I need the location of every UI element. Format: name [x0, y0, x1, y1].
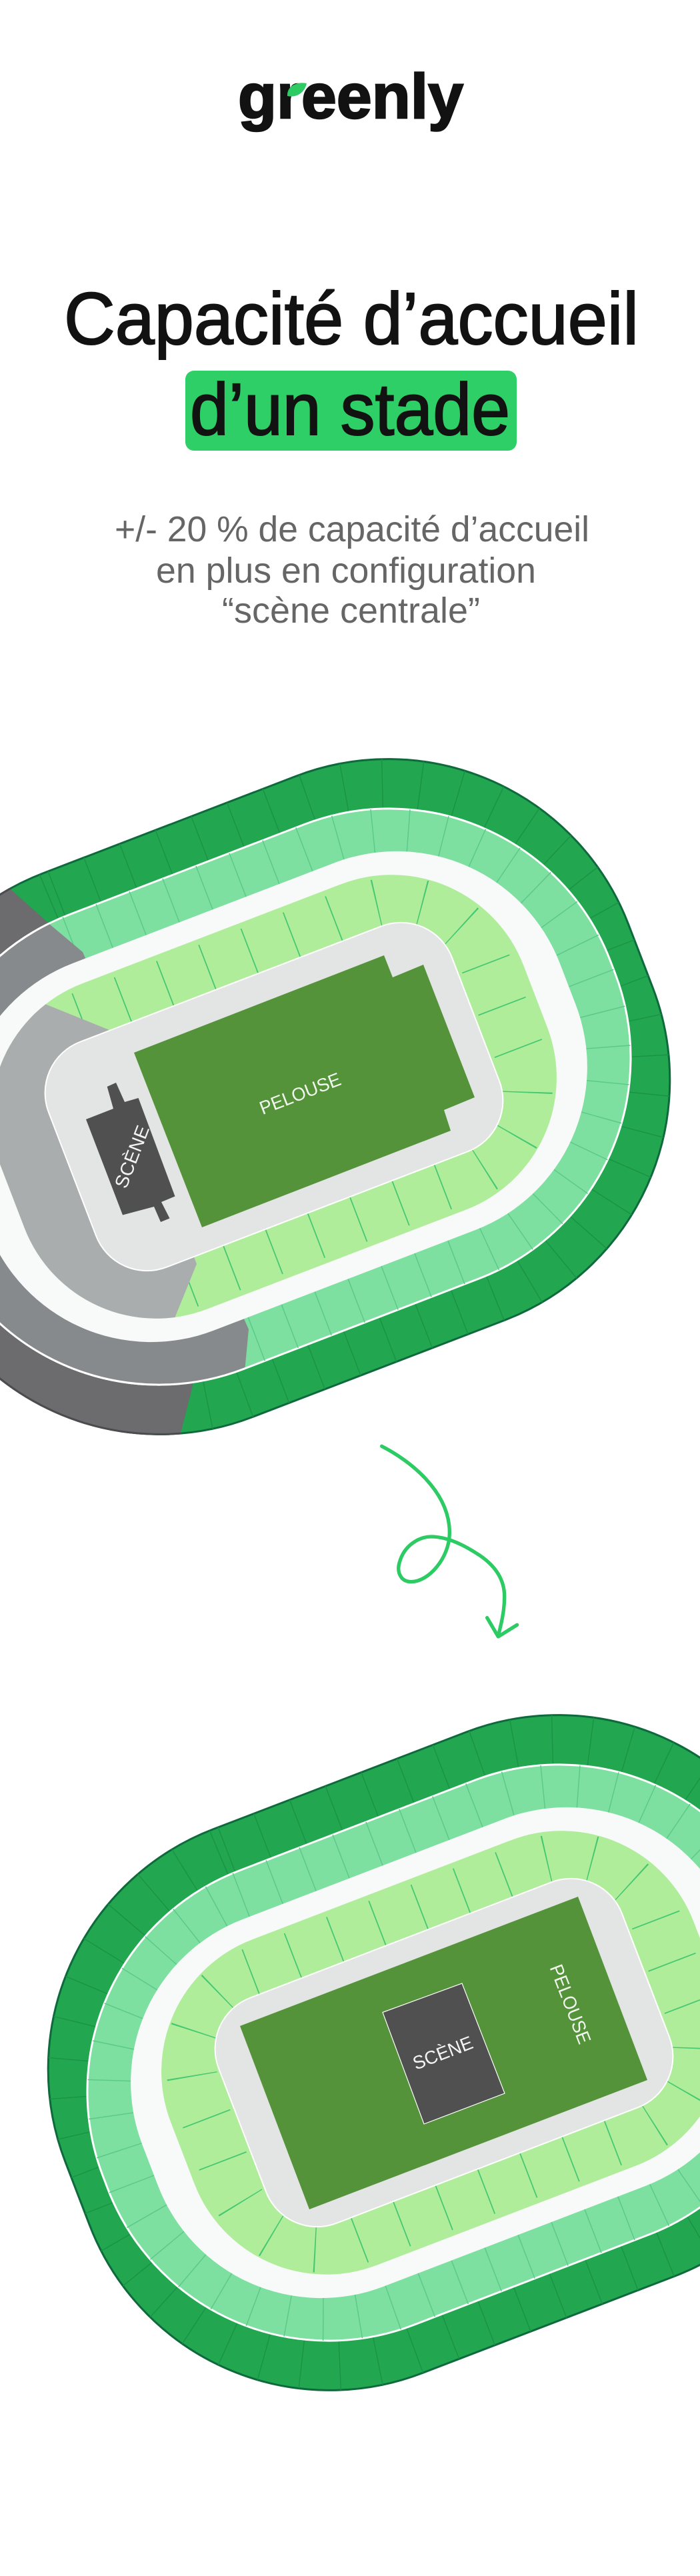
outer tier — [0, 758, 671, 1435]
arrow — [382, 1446, 517, 1637]
lower tier — [161, 1831, 700, 2275]
logo: greenly: greenly — [238, 61, 463, 132]
subtitle — [115, 509, 589, 631]
stadium: central-stage configuration — [47, 1714, 700, 2391]
track surround — [199, 1863, 689, 2243]
stage label: SCÈNE — [111, 1123, 153, 1191]
track surround — [29, 907, 519, 1287]
pitch label: PELOUSE — [546, 1961, 595, 2047]
concourse band — [0, 800, 638, 1393]
middle tier — [86, 1763, 700, 2342]
pitch label: PELOUSE — [257, 1069, 343, 1119]
pitch — [134, 955, 475, 1227]
subtitle: +/- 20 % de capacité d’accueil — [115, 509, 589, 549]
subtitle: “scène centrale” — [222, 591, 480, 631]
stage — [86, 1083, 175, 1222]
middle tier — [0, 807, 632, 1386]
pitch — [240, 1897, 647, 2209]
outer tier — [47, 1714, 700, 2391]
lower tier — [0, 875, 557, 1319]
stage — [383, 1983, 505, 2124]
stage label: SCÈNE — [410, 2032, 476, 2074]
title: Capacité d’accueil — [64, 278, 639, 360]
concourse band — [80, 1756, 700, 2349]
title — [64, 278, 639, 451]
subtitle: en plus en configuration — [156, 551, 536, 591]
title: d’un stade — [190, 369, 510, 451]
stadium: end-stage configuration — [0, 758, 671, 1435]
